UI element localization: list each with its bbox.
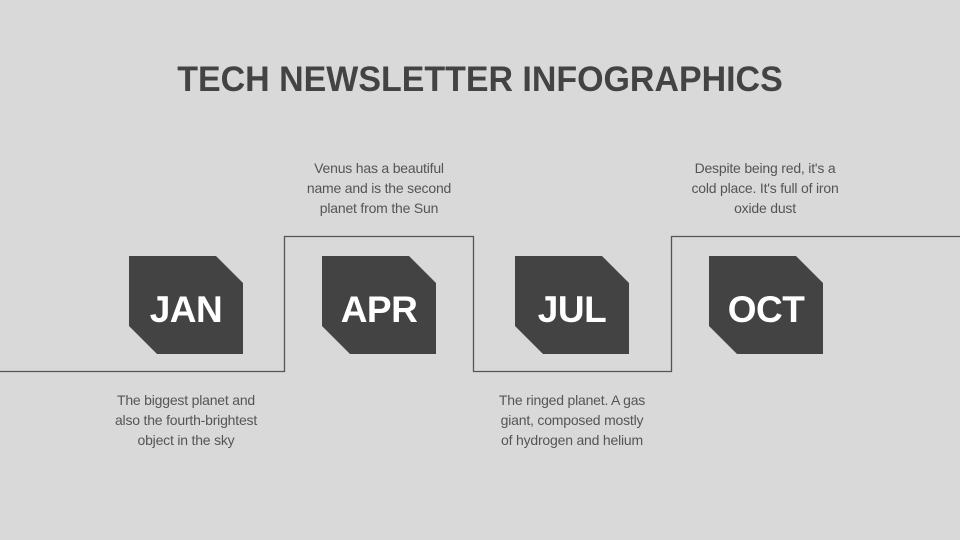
text: JUL <box>499 392 645 448</box>
text: JAN: also the fourth-brightest <box>115 412 257 428</box>
text: APR: planet from the Sun <box>320 200 438 216</box>
text: APR <box>307 160 451 216</box>
text: JUL: of hydrogen and helium <box>501 432 643 448</box>
text: OCT: Despite being red, it's a <box>695 160 835 176</box>
text: APR: Venus has a beautiful <box>314 160 444 176</box>
text: JAN: object in the sky <box>138 432 234 448</box>
box: JAN <box>129 256 243 354</box>
text: APR: name and is the second <box>307 180 451 196</box>
box: JUL <box>515 256 629 354</box>
text: JUL: The ringed planet. A gas <box>499 392 645 408</box>
box: JUL: JUL <box>538 289 606 330</box>
box: APR: APR <box>341 289 417 330</box>
box: OCT: OCT <box>728 289 804 330</box>
text: OCT: cold place. It's full of iron <box>691 180 839 196</box>
title: TECH NEWSLETTER INFOGRAPHICS <box>177 60 783 99</box>
text: OCT <box>691 160 839 216</box>
text: JAN <box>115 392 258 448</box>
box: APR <box>322 256 436 354</box>
box: JAN: JAN <box>150 289 222 330</box>
text: JUL: giant, composed mostly <box>501 412 643 428</box>
box: OCT <box>709 256 823 354</box>
text: JAN: The biggest planet and <box>117 392 255 408</box>
text: OCT: oxide dust <box>734 200 796 216</box>
